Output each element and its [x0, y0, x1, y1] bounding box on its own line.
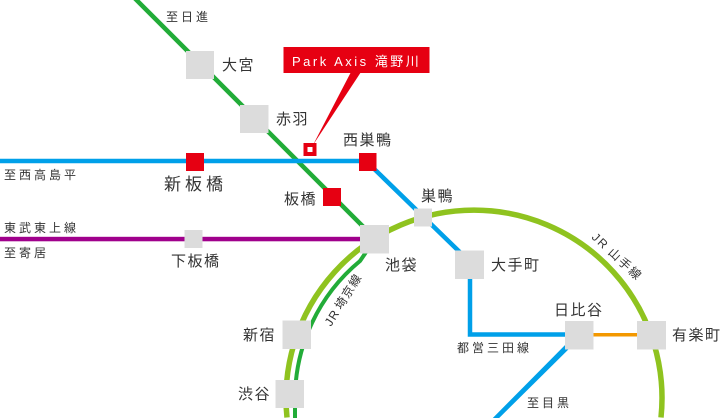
label: to Nishidai: 至西高島平 [4, 167, 79, 182]
label: Shimo-Itabashi: 下板橋 [171, 253, 221, 270]
station: Omiya [186, 51, 214, 79]
label: Hibiya: 日比谷 [554, 302, 604, 319]
label: Shibuya: 渋谷 [238, 386, 271, 403]
label: Omiya: 大宮 [222, 57, 255, 74]
label: Akabane: 赤羽 [276, 111, 309, 128]
label: Tobu Tojo Line: 東武東上線 [4, 220, 79, 235]
station: Sugamo [414, 208, 432, 226]
label: Shin-Itabashi: 新板橋 [164, 175, 227, 194]
label: JR Yamanote Line: JR 山手線 [589, 229, 646, 284]
label: Otemachi: 大手町 [491, 257, 541, 274]
label: Toei Mita Line: 都営三田線 [457, 340, 532, 355]
line: Tobu Tojo [0, 237, 375, 241]
station: Shibuya [276, 380, 304, 408]
station: Hibiya [565, 321, 594, 350]
callout: Park Axis Takinogawa [284, 47, 430, 154]
callout box [284, 47, 430, 73]
label: Sugamo: 巣鴨 [421, 188, 454, 205]
station: Yurakucho [637, 321, 666, 350]
label: Nishi-Sugamo: 西巣鴨 [343, 132, 393, 149]
label: JR Saikyo Line: JR 埼京線 [321, 270, 365, 329]
property marker [306, 145, 314, 154]
callout text: Park Axis 滝野川 [292, 54, 421, 69]
line: JR Saikyo [295, 239, 375, 418]
line: Toei Mita to Meguro [493, 335, 583, 418]
station: Nishi-Sugamo [359, 153, 376, 171]
label: Shinjuku: 新宿 [243, 327, 276, 344]
line: Toei Mita [0, 161, 579, 334]
station: Ikebukuro [360, 225, 389, 254]
label: to Meguro: 至目黒 [527, 396, 572, 410]
station: Shin-Itabashi [186, 153, 204, 171]
callout pointer [313, 72, 361, 145]
station: Akabane [240, 105, 268, 133]
line: Hibiya to Yurakucho connector [593, 333, 637, 336]
label: to Yorii: 至寄居 [4, 246, 49, 260]
station: Otemachi [455, 250, 484, 279]
station: Shimo-Itabashi [184, 230, 202, 248]
label: Itabashi: 板橋 [284, 191, 317, 208]
label: to Nisshin: 至日進 [166, 10, 211, 24]
line: JR Yamanote arc [286, 210, 662, 418]
station: Shinjuku [282, 320, 311, 349]
station: Itabashi [323, 188, 341, 206]
line: diagonal green line [133, 0, 378, 238]
label: Ikebukuro: 池袋 [385, 257, 418, 274]
